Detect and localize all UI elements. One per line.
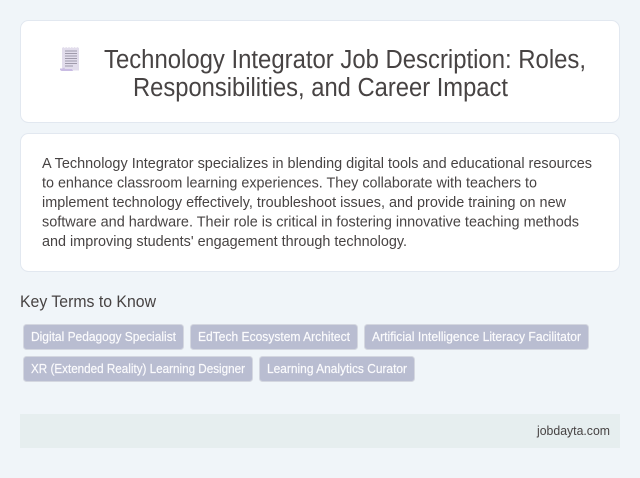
text block: description [42,156,592,250]
chip: Learning Analytics Curator: Learning Analytics Curator [267,361,408,376]
chip: EdTech Ecosystem Architect: EdTech Ecosystem Architect [198,329,350,344]
title: Responsibilities, and Career Impact [133,74,508,102]
footer: jobdayta.com [536,424,610,438]
panel: description [20,134,620,272]
text block: description: A Technology Integrator specializes in blending digital tools and educational resources [42,156,592,172]
chip: EdTech Ecosystem Architect [190,324,358,350]
text block: description: to enhance classroom learning experiences. They collaborate with teachers to [42,176,537,192]
panel: title card [20,20,620,122]
chip: XR Learning Designer: XR (Extended Reality) Learning Designer [31,361,246,376]
chip: Digital Pedagogy Specialist [24,324,184,350]
chip: Learning Analytics Curator [260,356,414,382]
text block: description: implement technology effectively, troubleshoot issues, and provide training on new [42,195,566,211]
title [104,46,586,102]
footer [20,414,620,448]
icon: document scroll [60,47,79,71]
chip: Digital Pedagogy Specialist: Digital Pedagogy Specialist [31,329,176,344]
text block: description: software and hardware. Their role is critical in fostering innovative teaching methods [42,214,579,230]
chip: Artificial Intelligence Literacy Facilitator [364,324,588,350]
heading: key terms: Key Terms to Know [20,293,156,311]
text block: description: and improving students' engagement through technology. [42,234,407,250]
chip: Artificial Intelligence Literacy Facilitator: Artificial Intelligence Literacy Facilitator [372,329,582,344]
title: Technology Integrator Job Description: Roles, [104,46,586,74]
chip: XR Learning Designer [24,356,252,382]
